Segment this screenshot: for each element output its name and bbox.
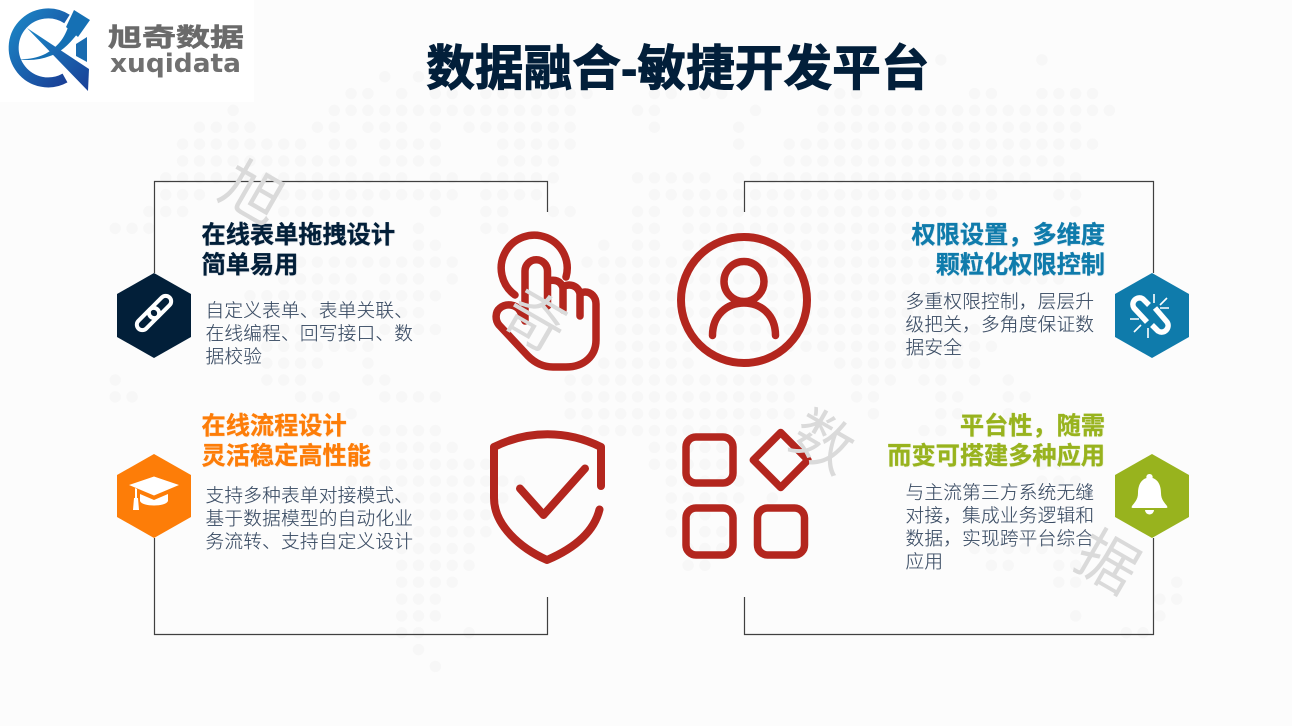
watermark: 数: 数 [780, 399, 865, 487]
icon: broken link hexagon [1115, 273, 1189, 358]
heading: 权限设置，多维度 [911, 222, 1105, 249]
body text: 基于数据模型的自动化业 [206, 508, 413, 529]
logo: 旭奇数据 xuqidata: xuqidata [110, 49, 241, 79]
body text: 多重权限控制，层层升 [906, 291, 1094, 312]
body text [206, 300, 413, 366]
heading: 平台性，随需 [960, 412, 1105, 440]
logo: 旭奇数据 xuqidata [8, 8, 244, 91]
body text: 数据，实现跨平台综合 [906, 528, 1094, 549]
heading [202, 222, 396, 278]
icon: shield with check [490, 430, 605, 564]
heading: 在线流程设计 [202, 412, 347, 440]
body text: 应用 [906, 551, 943, 572]
logo: 旭奇数据 xuqidata: 旭奇数据 [108, 24, 244, 52]
icon: bell hexagon [1115, 454, 1189, 538]
heading: 颗粒化权限控制 [936, 252, 1105, 278]
body text: 支持多种表单对接模式、 [206, 485, 413, 506]
title: 数据融合-敏捷开发平台 [426, 42, 930, 96]
body text: 在线编程、回写接口、数 [206, 322, 413, 344]
body text: 对接，集成业务逻辑和 [906, 505, 1094, 526]
icon: app grid [682, 428, 812, 559]
icon: user in circle [677, 233, 811, 367]
body text: 与主流第三方系统无缝 [906, 482, 1094, 503]
body text: 级把关，多角度保证数 [906, 314, 1094, 335]
body text [906, 291, 1094, 358]
watermark: 旭: 旭 [210, 150, 295, 238]
body text: 务流转、支持自定义设计 [206, 531, 413, 552]
heading: 灵活稳定高性能 [202, 442, 371, 470]
panel: form drag and drop [117, 222, 413, 366]
panel: platform [887, 412, 1189, 572]
heading: 在线表单拖拽设计 [202, 222, 395, 249]
heading [887, 412, 1105, 470]
icon: tapping hand [492, 231, 600, 371]
icon: chain link hexagon [117, 273, 191, 358]
heading [202, 412, 371, 470]
icon: graduation cap hexagon [117, 454, 191, 538]
body text [206, 485, 413, 552]
heading: 简单易用 [202, 252, 298, 278]
frame: right bracket lines [744, 180, 1154, 636]
body text: 据安全 [906, 337, 962, 358]
heading [911, 222, 1105, 278]
body text: 自定义表单、表单关联、 [206, 300, 413, 320]
frame: left bracket lines [154, 180, 548, 636]
watermark: 奇: 奇 [493, 278, 578, 366]
watermark: 据: 据 [1065, 519, 1150, 607]
body text [906, 482, 1094, 572]
panel: permissions [906, 222, 1189, 358]
body text: 据校验 [206, 346, 262, 366]
panel: workflow design [117, 412, 413, 552]
heading: 而变可搭建多种应用 [887, 442, 1105, 470]
